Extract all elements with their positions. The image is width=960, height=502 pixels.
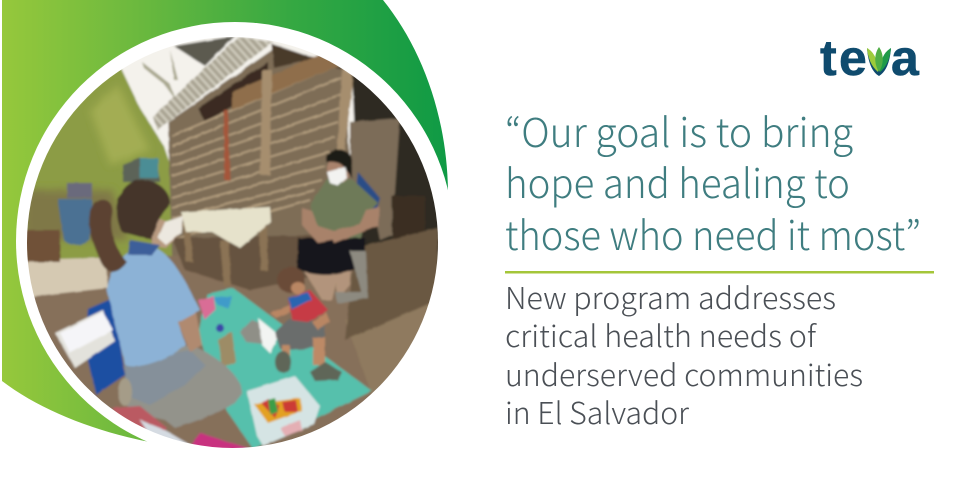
white ring around the photo bbox=[16, 22, 454, 460]
subheading: in El Salvador bbox=[505, 389, 689, 433]
lighter floor lower right bbox=[352, 305, 428, 392]
floor under table bbox=[173, 234, 312, 290]
nurse bbox=[89, 180, 242, 428]
photo: home visit in El Salvador bbox=[20, 30, 450, 460]
teva logo: a bbox=[891, 30, 920, 86]
blue barrel bbox=[58, 199, 92, 245]
teva logo: e bbox=[839, 30, 867, 86]
plastic box of blocks bbox=[247, 376, 320, 446]
table on the right bbox=[392, 196, 425, 240]
subheading bbox=[505, 274, 863, 433]
laundry bbox=[123, 158, 160, 182]
red cord bbox=[224, 110, 230, 180]
teal mat bbox=[198, 288, 372, 449]
divider bbox=[505, 271, 934, 274]
quote heading: hope and healing to bbox=[505, 152, 850, 210]
seated woman bbox=[297, 150, 380, 304]
teva logo: v bbox=[868, 30, 896, 86]
subheading: critical health needs of bbox=[505, 312, 817, 356]
cloth above barrel bbox=[67, 183, 92, 198]
dark gaps under the roof bbox=[198, 62, 268, 122]
wall bbox=[168, 50, 352, 262]
dark interior bbox=[350, 74, 438, 264]
corrugated roof bbox=[153, 37, 273, 130]
upper wall boards bbox=[232, 52, 338, 110]
sky bbox=[120, 37, 356, 161]
ground bbox=[34, 253, 376, 448]
wooden slats bbox=[172, 64, 342, 240]
green crescent background bbox=[2, 0, 448, 443]
wall posts bbox=[260, 68, 354, 175]
dark back roof bbox=[174, 36, 235, 66]
blue crate and clipboard bbox=[55, 298, 125, 395]
subheading: underserved communities bbox=[505, 351, 863, 395]
quote heading: those who need it most” bbox=[505, 204, 921, 262]
table with cloth bbox=[181, 207, 271, 286]
subheading: New program addresses bbox=[505, 274, 836, 318]
toys on mat bbox=[198, 296, 279, 368]
quote heading bbox=[505, 101, 921, 262]
child bbox=[270, 267, 342, 381]
tree highlights bbox=[90, 85, 150, 165]
stacked chairs bbox=[350, 118, 400, 240]
teva logo: t bbox=[820, 30, 837, 86]
quote heading: “Our goal is to bring bbox=[505, 101, 853, 159]
sunlit ground bbox=[28, 256, 109, 298]
teva logo bbox=[820, 30, 920, 86]
tree bbox=[20, 66, 172, 262]
floor at right bbox=[345, 228, 438, 340]
icon: teva leaves bbox=[867, 47, 891, 76]
red bag and pink tray bbox=[112, 405, 248, 448]
branches bbox=[142, 50, 178, 100]
